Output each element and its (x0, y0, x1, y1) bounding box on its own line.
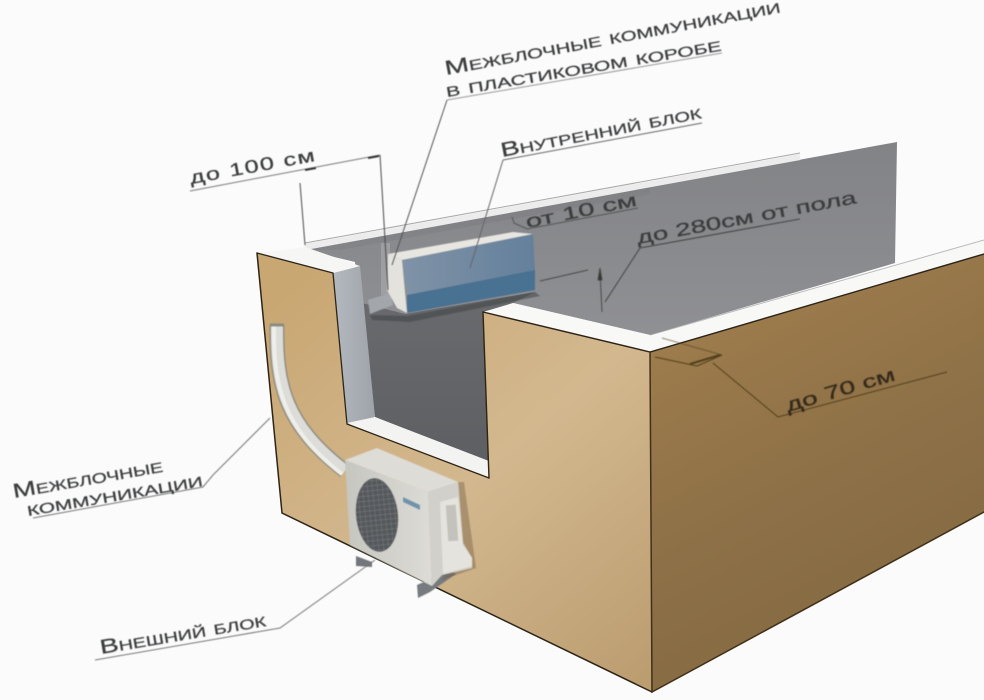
pipe leader (33, 418, 270, 518)
mounting brackets (356, 556, 456, 598)
label: inter-unit lines (11, 455, 204, 521)
label: inter-unit lines: коммуникации (25, 469, 204, 521)
label: from 10 cm: от 10 см (524, 190, 639, 232)
side panel (440, 497, 472, 574)
280 cm leader (605, 219, 800, 302)
second-line underline (447, 53, 722, 100)
label: indoor unit: Внутренний блок (499, 101, 704, 162)
indoor unit leader (470, 123, 702, 268)
70 cm dimension (655, 338, 947, 417)
inter-unit pipe on wall (270, 325, 345, 474)
indoor unit (368, 232, 540, 322)
fan grille (352, 476, 402, 554)
label: inter-unit lines in plastic duct: в пластиковом коробе (444, 34, 723, 102)
logo (403, 497, 420, 510)
outdoor unit leader (95, 560, 375, 660)
label: up to 100 cm: до 100 см (188, 145, 318, 188)
pipe to indoor unit (368, 293, 393, 314)
280 cm height dimension (540, 268, 602, 312)
label: outdoor unit: Внешний блок (98, 609, 269, 659)
side wall outer face (650, 254, 984, 692)
left pier inner side (333, 266, 375, 425)
10 cm leader (512, 208, 638, 229)
window sill (347, 417, 489, 478)
label: up to 70 cm: до 70 см (783, 365, 897, 416)
wall top faces (257, 240, 984, 352)
100 cm dimension (190, 155, 388, 290)
label: inter-unit lines in plastic duct (443, 0, 782, 102)
label: up to 280 cm from floor: до 280см от пола (635, 187, 859, 248)
front wall outer face (257, 253, 652, 692)
back wall (305, 142, 897, 335)
plastic duct (381, 243, 390, 295)
window opening interior (358, 292, 535, 463)
wall edge lines (257, 253, 984, 692)
label: inter-unit lines in plastic duct: Межблочные коммуникации (443, 0, 782, 80)
label: inter-unit lines: Межблочные (11, 455, 165, 503)
outdoor unit (345, 448, 476, 598)
duct leader (392, 100, 447, 265)
